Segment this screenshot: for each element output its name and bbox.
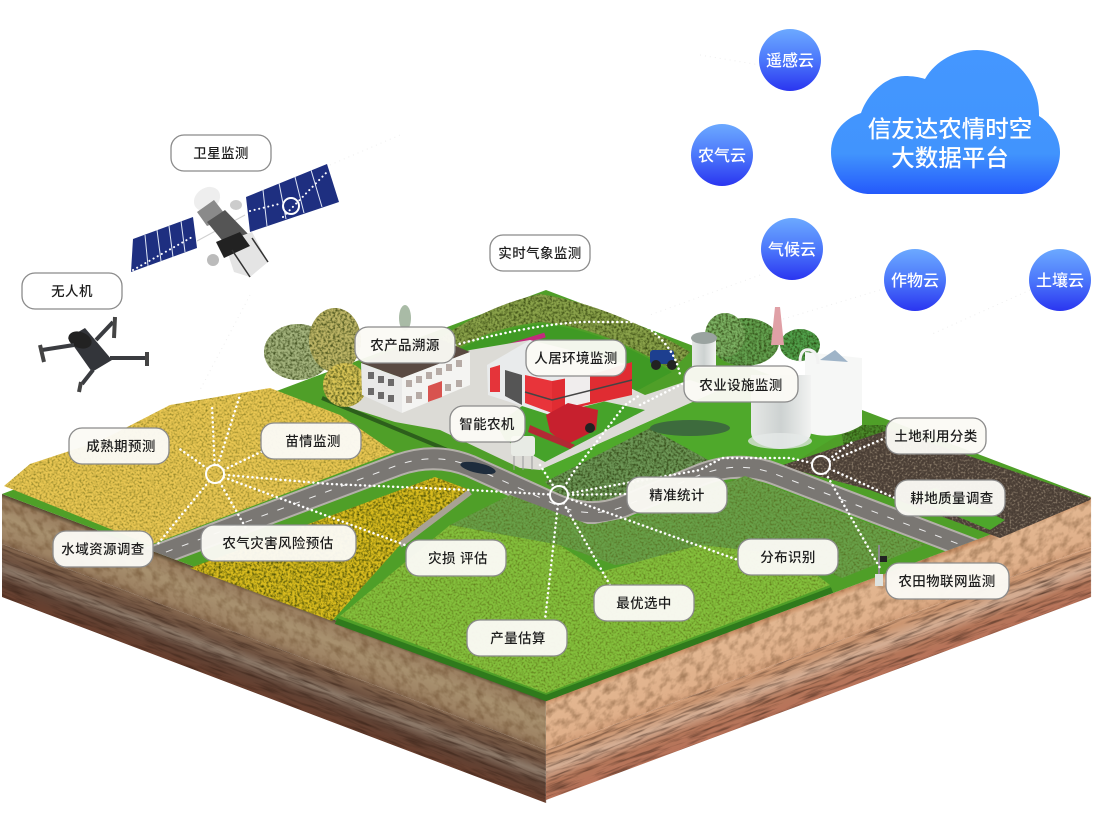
label: 灾损评估: 灾损 评估 — [428, 550, 488, 566]
label: 土地利用分类 — [886, 418, 986, 454]
label: 最优选中: 最优选中 — [616, 596, 672, 611]
label: 苗情监测: 苗情监测 — [285, 434, 341, 449]
hedge patch — [650, 420, 730, 436]
sunflower field — [190, 477, 470, 621]
trees left — [264, 305, 411, 407]
IoT sensor pole — [875, 545, 887, 586]
label: 农气灾害风险预估 — [201, 525, 356, 561]
node ring: soil — [812, 456, 830, 474]
dotted network lines on field — [157, 322, 895, 620]
bubble: 农气云: 农气云 — [698, 147, 746, 165]
label: 农田物联网监测 — [886, 563, 1009, 599]
label: 成熟期预测: 成熟期预测 — [86, 438, 156, 454]
label: 产量估算: 产量估算 — [490, 630, 546, 646]
label: 土地利用分类: 土地利用分类 — [894, 429, 978, 444]
bubble: 作物云 — [884, 249, 946, 311]
concrete plaza — [325, 340, 720, 470]
label: 耕地质量调查: 耕地质量调查 — [910, 491, 994, 506]
label: 产量估算 — [467, 620, 567, 656]
label: 灾损评估 — [406, 540, 506, 576]
label: 农业设施监测 — [684, 366, 798, 402]
left hedge — [322, 398, 520, 482]
left soil face — [2, 494, 546, 803]
left solar panel — [131, 217, 197, 272]
farmland top surface — [2, 290, 1091, 700]
node ring: wheat — [206, 465, 224, 483]
label: 精准统计 — [627, 477, 727, 513]
label: 卫星监测: 卫星监测 — [193, 146, 249, 161]
white office building — [361, 335, 470, 413]
label: 苗情监测 — [261, 423, 361, 459]
label: 农产品溯源: 农产品溯源 — [370, 338, 440, 353]
dark green crop field — [450, 476, 925, 578]
label: 分布识别: 分布识别 — [760, 549, 816, 565]
bright corn field — [340, 525, 830, 693]
label: 水域资源调查: 水域资源调查 — [61, 542, 145, 557]
bubble: 气候云: 气候云 — [768, 241, 816, 259]
bubble: 遥感云: 遥感云 — [766, 52, 814, 70]
gravel strip — [400, 492, 470, 545]
label: 成熟期预测 — [69, 428, 169, 464]
label: 农气灾害风险预估: 农气灾害风险预估 — [222, 535, 334, 551]
bubble: 农气云 — [691, 124, 753, 186]
grass patches right — [910, 488, 1005, 530]
label: 人居环境监测: 人居环境监测 — [534, 350, 618, 366]
label: 耕地质量调查 — [895, 480, 1005, 516]
cloud title line 2: 大数据平台 — [891, 145, 1009, 171]
bubble: 遥感云 — [759, 29, 821, 91]
bubble: 气候云 — [761, 218, 823, 280]
back lawn — [458, 324, 672, 400]
label: 分布识别 — [738, 539, 838, 575]
label: 智能农机: 智能农机 — [459, 416, 515, 432]
label: 农田物联网监测: 农田物联网监测 — [898, 574, 996, 589]
grass base — [2, 290, 1091, 700]
wheat field — [4, 388, 395, 545]
small silo — [511, 436, 535, 470]
label: 水域资源调查 — [53, 531, 153, 567]
hill hedge — [440, 294, 690, 370]
faint connection lines — [200, 55, 1030, 390]
label: 人居环境监测 — [526, 340, 626, 376]
icon: satellite — [131, 164, 339, 277]
satellite body — [189, 182, 268, 277]
label: 实时气象监测 — [490, 235, 590, 271]
trees right — [705, 313, 820, 366]
right hedge strip — [840, 425, 895, 452]
icon: drone — [40, 317, 147, 392]
red barn — [487, 340, 632, 415]
car shadow — [459, 459, 497, 477]
node ring: junction — [550, 486, 568, 504]
label: 精准统计: 精准统计 — [649, 487, 705, 503]
label: 无人机: 无人机 — [51, 284, 93, 299]
cloud title line 1: 信友达农情时空 — [868, 116, 1032, 142]
cloud: platform — [831, 50, 1060, 194]
harvester lawn — [497, 392, 645, 462]
label: 农业设施监测: 农业设施监测 — [699, 378, 783, 393]
right soil face — [546, 497, 1091, 800]
pink flower bed — [490, 335, 545, 352]
bubble: 作物云: 作物云 — [891, 272, 939, 290]
blue tractor — [650, 350, 677, 370]
label: 卫星监测 — [171, 135, 271, 171]
right lawn — [540, 378, 850, 505]
label: 智能农机 — [450, 406, 525, 442]
front grass edge — [336, 590, 832, 698]
right solar panel — [246, 164, 339, 232]
grain silos — [691, 332, 862, 449]
label: 无人机 — [22, 273, 122, 309]
red combine harvester — [528, 403, 598, 449]
soil block — [2, 494, 1091, 803]
dark shrub patch — [545, 428, 712, 505]
bubble: 土壤云 — [1029, 249, 1091, 311]
label: 最优选中 — [594, 585, 694, 621]
road — [150, 459, 990, 558]
satellite ring — [283, 198, 299, 214]
ploughed soil field — [780, 429, 1091, 538]
label: 农产品溯源 — [355, 327, 455, 363]
bubble: 土壤云: 土壤云 — [1036, 271, 1084, 290]
radio tower — [771, 307, 784, 345]
label: 实时气象监测: 实时气象监测 — [498, 245, 582, 261]
